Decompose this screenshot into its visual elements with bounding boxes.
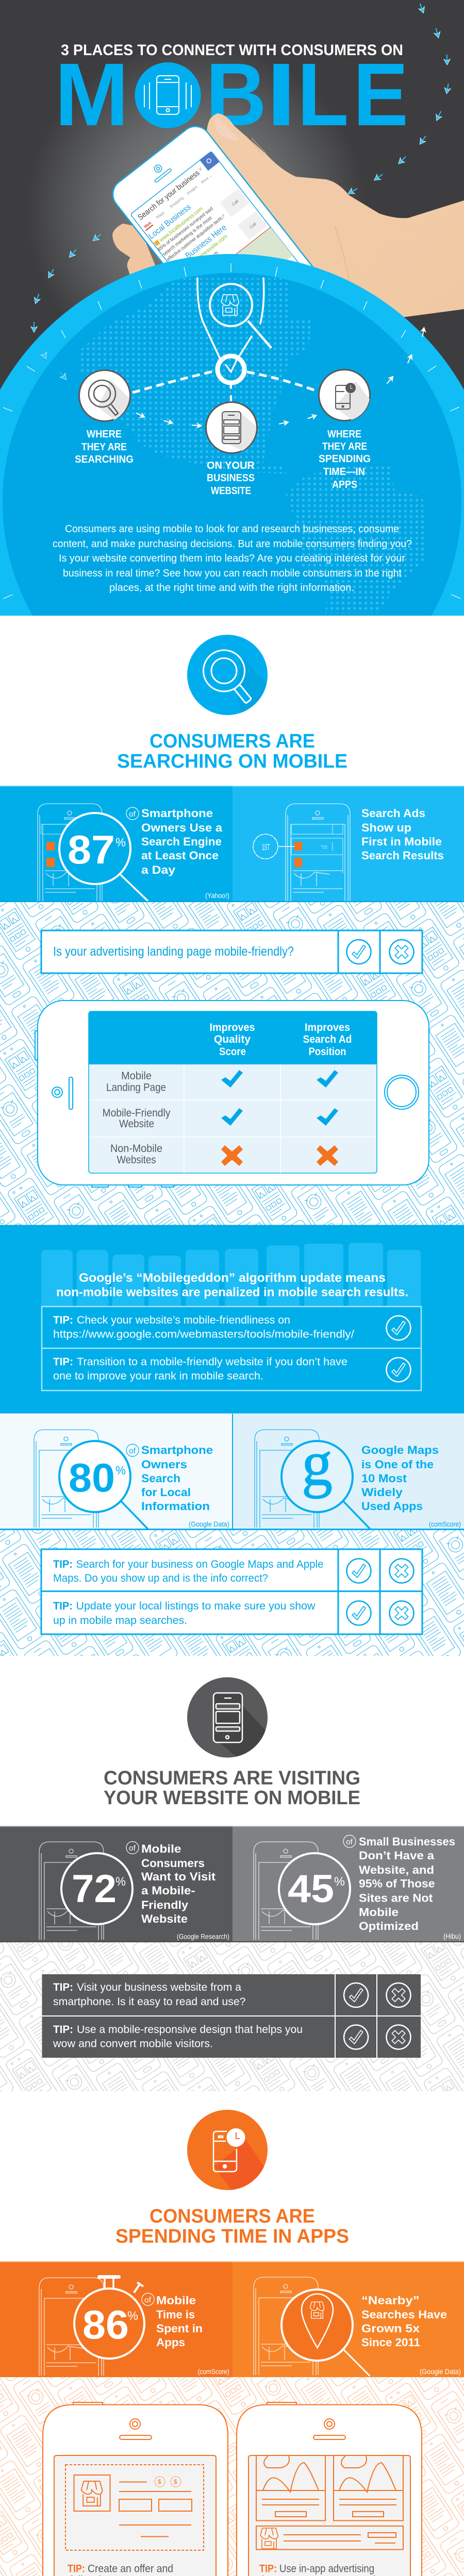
- question box: Is your advertising landing page mobile-friendly?: [53, 944, 294, 959]
- tips box: [42, 1974, 421, 2058]
- panel: hero header: [0, 0, 464, 616]
- tips box: Visit your business website from a: [77, 1981, 241, 1993]
- tips box: TIP:: [53, 1558, 73, 1570]
- heading: consumers are spending time in apps: SPENDING TIME IN APPS: [115, 2226, 349, 2247]
- of badge: [126, 1444, 139, 1456]
- stat text: “Nearby”: [361, 2294, 420, 2307]
- label: where they are spending time in apps: APPS: [332, 479, 357, 490]
- panel: stat 80 percent: [0, 1414, 233, 1529]
- panel: stat 86 percent: [0, 2261, 464, 2377]
- circle with 45 percent: %: [334, 1875, 345, 1889]
- panel: search section heading: [118, 635, 346, 768]
- stat text: Website, and: [359, 1863, 434, 1876]
- phone showing mobile search results: Images: [186, 184, 198, 196]
- heading: MOBILE wordmark: [61, 62, 405, 128]
- tips box: [42, 1307, 421, 1391]
- heading: MOBILE wordmark: O: [144, 65, 191, 129]
- of badge: [126, 807, 139, 820]
- stat text: Search Ads: [361, 807, 425, 820]
- phone showing mobile search results: yourbusinesssite.com: [184, 233, 229, 270]
- stat text: is One of the: [361, 1458, 434, 1471]
- comparison table: Mobile: [121, 1070, 152, 1082]
- text block: intro paragraph: places, at the right time and with the right information.: [109, 582, 354, 594]
- source: (Google Research): [177, 1932, 229, 1940]
- stat text: 95% of Those: [359, 1877, 435, 1890]
- phone illustration: [254, 2277, 318, 2375]
- heading: consumers are searching on mobile: CONSUMERS ARE: [150, 731, 315, 752]
- stat text: Owners: [141, 1458, 187, 1471]
- stat text: Consumers: [141, 1857, 205, 1870]
- tips box: smartphone. Is it easy to read and use?: [53, 1996, 246, 2008]
- magnifier with 80 percent: 80: [69, 1455, 115, 1500]
- stat text: Sites are Not: [359, 1891, 433, 1904]
- tips box: TIP:: [53, 1356, 73, 1368]
- magnifier with 80 percent: %: [115, 1464, 126, 1478]
- label: on your business website: ON YOUR: [207, 460, 255, 471]
- stat text: Search Engine: [141, 835, 222, 848]
- phone: in-app advertising tip: [237, 2402, 422, 2576]
- phone: create an offer tip: $: [174, 2478, 177, 2485]
- magnifier with Google g: g: [302, 1428, 333, 1499]
- tip text: TIP:: [259, 2563, 277, 2575]
- comparison table: Website: [119, 1118, 154, 1130]
- label: where they are spending time in apps: SPENDING: [319, 453, 371, 465]
- circle with 72 percent: %: [115, 1875, 126, 1889]
- comparison table: Landing Page: [106, 1082, 166, 1093]
- icon: phone with clock in orange circle: [187, 2110, 271, 2195]
- panel: orange pattern with two phones: [0, 2377, 464, 2576]
- phone showing mobile search results: www.localbusiness.com: [158, 206, 204, 244]
- landscape phone with comparison table: [35, 1001, 429, 1187]
- stat text: Website: [141, 1912, 188, 1925]
- stat text: [359, 1835, 455, 1933]
- magnifier with 87 percent: 87: [68, 827, 115, 872]
- heading: consumers are spending time in apps: [115, 2206, 349, 2247]
- panel: Mobilegeddon: [0, 1225, 464, 1414]
- panel: stat 45 percent: [233, 1826, 464, 1942]
- label: where they are searching: THEY ARE: [81, 442, 127, 453]
- phone showing mobile search results: More ⌄: [200, 173, 213, 185]
- label: where they are searching: WHERE: [87, 429, 122, 440]
- phone showing mobile search results: Local Business: [147, 202, 193, 241]
- of badge: of: [144, 2296, 152, 2304]
- stopwatch with 86 percent: [74, 2275, 144, 2359]
- comparison table: Websites: [117, 1154, 156, 1166]
- heading: consumers are spending time in apps: CONSUMERS ARE: [150, 2206, 315, 2227]
- tip text: TIP:: [68, 2563, 85, 2575]
- text block: intro paragraph: business in real time? See how you can reach mobile consumers in the right: [63, 568, 402, 579]
- circle with 45 percent: [279, 1853, 350, 1924]
- stat text: Friendly: [141, 1899, 189, 1911]
- comparison table: [89, 1011, 377, 1173]
- phone showing mobile search results: ×: [196, 164, 205, 174]
- comparison table: Non-Mobile: [110, 1143, 162, 1155]
- tips box: Maps. Do you show up and is the info correct?: [53, 1572, 268, 1584]
- stat text: Google Maps: [361, 1444, 439, 1456]
- magnifier with Google g: [280, 1440, 371, 1529]
- tips box: https://www.google.com/webmasters/tools/mobile-friendly/: [53, 1328, 354, 1341]
- stat text: Since 2011: [361, 2336, 420, 2349]
- of badge: of: [129, 1447, 136, 1455]
- ghost phone row: [41, 1243, 421, 1317]
- phone showing mobile search results: Web: [143, 221, 153, 229]
- panel: stat search ads: [233, 786, 464, 902]
- phone showing mobile search results: Maps: [155, 210, 165, 219]
- stat text: [141, 1444, 213, 1513]
- phone showing mobile search results: [112, 126, 313, 267]
- stat text: Owners Use a: [141, 821, 223, 834]
- phone illustration: [34, 1430, 98, 1528]
- stat text: Information: [141, 1500, 210, 1513]
- text block: intro paragraph: content, and make purchasing decisions. But are mobile consumers finding you?: [53, 538, 412, 550]
- comparison table: Mobile-Friendly: [102, 1107, 171, 1119]
- tip text: [68, 2563, 173, 2576]
- stat text: Mobile: [359, 1906, 399, 1919]
- stopwatch with 86 percent: %: [127, 2309, 138, 2323]
- of badge: of: [129, 810, 136, 819]
- panel: blue phone pattern with landing page question and table: [0, 902, 464, 1225]
- phone illustration: [255, 1430, 319, 1528]
- heading: MOBILE wordmark: E: [353, 44, 408, 144]
- phone illustration: [39, 2278, 104, 2376]
- phone illustration: [254, 1842, 318, 1940]
- tip text: Use in-app advertising: [279, 2563, 374, 2575]
- source: (Google Data): [420, 2367, 461, 2376]
- phone illustration: [38, 804, 102, 902]
- icon: location pin with magnifier and store: [197, 278, 271, 401]
- phone: create an offer tip: $: [158, 2478, 161, 2485]
- stat text: Search Results: [361, 849, 444, 862]
- phone showing mobile search results: Call: [248, 222, 257, 230]
- stat text: at Least Once: [141, 849, 219, 862]
- tips box: Transition to a mobile-friendly website if you don’t have: [77, 1356, 347, 1368]
- phone showing mobile search results: Call: [231, 199, 239, 207]
- label: where they are spending time in apps: WHERE: [327, 429, 361, 440]
- stat text: Want to Visit: [141, 1870, 216, 1883]
- stat text: Search: [141, 1472, 180, 1485]
- panel: stat 72 percent: [0, 1826, 464, 1942]
- title: 3 PLACES TO CONNECT WITH CONSUMERS ON: [61, 42, 403, 59]
- comparison table: Position: [308, 1046, 346, 1058]
- stat text: [361, 807, 444, 862]
- tips box: Update your local listings to make sure you show: [76, 1600, 316, 1612]
- stat text: [361, 1444, 439, 1513]
- heading: MOBILE wordmark: L: [297, 44, 349, 144]
- label: where they are searching: SEARCHING: [75, 454, 134, 465]
- of badge: of: [129, 1844, 136, 1853]
- comparison table: Improves: [209, 1022, 255, 1033]
- text block: intro paragraph: Consumers are using mobile to look for and research businesses, consume: [65, 523, 399, 535]
- tips box: wow and convert mobile visitors.: [53, 2038, 213, 2050]
- label: on your business website: [207, 462, 255, 494]
- phone showing mobile search results: search marketing is the most: [162, 215, 213, 257]
- magnifier with 87 percent: %: [115, 836, 126, 850]
- callout text: Google’s “Mobilegeddon” algorithm update means: [79, 1271, 386, 1285]
- tip text: Create an offer and: [88, 2563, 173, 2575]
- hand holding phone: [112, 113, 464, 330]
- app ad illustration: [256, 2456, 403, 2550]
- stat text: [156, 2294, 203, 2349]
- phone showing mobile search results: Shopping: [169, 195, 184, 209]
- panel: stat 87 percent: [0, 786, 233, 901]
- stat text: Optimized: [359, 1920, 419, 1933]
- magnifier with 80 percent: [59, 1441, 148, 1529]
- panel: blue dome: [0, 254, 464, 616]
- tips box: TIP:: [53, 2024, 73, 2036]
- text block: intro paragraph: Is your website converting them into leads? Are you creating interest for your: [59, 553, 405, 564]
- stat text: [141, 807, 223, 876]
- callout text: non-mobile websites are penalized in mobile search results.: [56, 1285, 408, 1299]
- stat text: Mobile: [156, 2294, 196, 2307]
- stat text: Spent in: [156, 2322, 203, 2335]
- tips box: TIP:: [53, 1600, 73, 1612]
- tips box: Search for your business on Google Maps and Apple: [76, 1558, 324, 1570]
- tips box: TIP:: [53, 1981, 73, 1993]
- stat text: Grown 5x: [361, 2322, 420, 2335]
- heading: consumers are searching on mobile: SEARCHING ON MOBILE: [117, 751, 347, 772]
- stat text: a Day: [141, 863, 176, 876]
- tips box: Use a mobile-responsive design that helps you: [77, 2024, 303, 2036]
- comparison table: Improves: [305, 1022, 350, 1033]
- label: where they are spending time in apps: THEY ARE: [322, 441, 367, 452]
- icon: where they are spending time in apps: [319, 370, 370, 420]
- stat text: Mobile: [141, 1842, 181, 1855]
- callout text: [56, 1271, 408, 1299]
- phone showing mobile search results: Business Here: [184, 223, 228, 261]
- of badge: of: [346, 1838, 353, 1846]
- magnifier with 87 percent: [59, 813, 148, 901]
- icon: on your business website: [206, 402, 257, 453]
- icon: phone in dark circle: [187, 1677, 273, 1762]
- stat text: [361, 2294, 447, 2349]
- dashed connector lines: [132, 371, 318, 393]
- source: (Hibu): [443, 1932, 461, 1940]
- coupon illustration: [65, 2465, 204, 2550]
- tips box: TIP:: [53, 1314, 73, 1326]
- stat text: Apps: [156, 2336, 185, 2349]
- phone showing mobile search results: 85% of businesses surveyed said: [157, 206, 214, 252]
- heading: MOBILE wordmark: M: [55, 44, 129, 144]
- of badge: [126, 1841, 139, 1854]
- tips box: up in mobile map searches.: [53, 1615, 187, 1626]
- 1st badge: [253, 834, 294, 859]
- stat text: a Mobile-: [141, 1884, 195, 1897]
- question box: [41, 930, 422, 973]
- circle with 72 percent: [61, 1853, 132, 1924]
- text block: intro paragraph: [53, 523, 412, 594]
- stat text: [141, 1842, 216, 1925]
- arrows: white path across dome: [39, 326, 427, 429]
- circle with 45 percent: 45: [288, 1867, 334, 1911]
- panel: website tips on grey pattern: [0, 1942, 464, 2091]
- source: (comScore): [198, 2367, 229, 2376]
- tips box: Check your website’s mobile-friendliness on: [77, 1314, 290, 1326]
- label: on your business website: WEBSITE: [211, 485, 251, 497]
- magnifier with location pin: [281, 2290, 370, 2376]
- stat text: Smartphone: [141, 1444, 213, 1456]
- icon: magnifier in blue circle: [187, 635, 268, 715]
- stat text: Searches Have: [361, 2308, 447, 2321]
- stat text: Used Apps: [361, 1500, 423, 1513]
- stat text: Show up: [361, 821, 411, 834]
- comparison table: Quality: [214, 1033, 251, 1045]
- source: (Google Data): [189, 1520, 229, 1528]
- phone showing mobile search results: Search for your business: [136, 168, 201, 222]
- stat text: 10 Most: [361, 1472, 407, 1485]
- label: where they are spending time in apps: TIME—IN: [323, 466, 365, 478]
- 1st badge: 1ST: [262, 842, 270, 852]
- label: on your business website: BUSINESS: [207, 472, 255, 484]
- stat text: Small Businesses: [359, 1835, 455, 1848]
- phone illustration: [39, 1842, 104, 1940]
- comparison table: Search Ad: [303, 1033, 352, 1045]
- heading: consumers are searching on mobile: [117, 731, 347, 772]
- phone illustration: [286, 804, 350, 902]
- heading: consumers are visiting your website on mobile: YOUR WEBSITE ON MOBILE: [104, 1787, 360, 1809]
- label: where they are searching: [75, 430, 133, 463]
- stat text: Widely: [361, 1486, 403, 1499]
- heading: MOBILE wordmark: I: [266, 44, 296, 144]
- phone: create an offer tip: [43, 2402, 228, 2576]
- of badge: [343, 1835, 356, 1848]
- tips box: one to improve your rank in mobile search.: [53, 1370, 263, 1382]
- panel: stat Google Maps: [233, 1414, 464, 1529]
- circle with 72 percent: 72: [72, 1867, 117, 1911]
- comparison table: Score: [219, 1046, 246, 1058]
- stopwatch with 86 percent: 86: [82, 2302, 129, 2347]
- dotted world map: [80, 278, 425, 613]
- panel: stat nearby searches: [233, 2261, 464, 2377]
- icon: where they are searching: [79, 370, 130, 421]
- tips box: [41, 1549, 422, 1634]
- heading: MOBILE wordmark: B: [206, 44, 267, 144]
- label: where they are spending time in apps: [319, 429, 371, 490]
- stat text: Don’t Have a: [359, 1849, 435, 1862]
- panel: maps tips on blue pattern: [0, 1530, 464, 1656]
- source: (Yahoo!): [205, 891, 229, 900]
- phone showing mobile search results: increase search: [189, 250, 220, 276]
- phone showing mobile search results: effective customer acquisition tactic.²: [166, 214, 226, 262]
- stat text: First in Mobile: [361, 835, 442, 848]
- arrows: dotted path over the top: [31, 3, 452, 332]
- heading: consumers are visiting your website on mobile: CONSUMERS ARE VISITING: [104, 1768, 360, 1789]
- stat text: for Local: [141, 1486, 191, 1499]
- panel: apps section heading: [0, 2091, 464, 2261]
- of badge: [142, 2293, 154, 2306]
- stat text: Smartphone: [141, 807, 213, 820]
- phone showing mobile search results: businesses.: [193, 261, 217, 281]
- stat text: Time is: [156, 2308, 195, 2321]
- heading: consumers are visiting your website on mobile: [104, 1768, 360, 1809]
- panel: website section heading: [0, 1656, 464, 1826]
